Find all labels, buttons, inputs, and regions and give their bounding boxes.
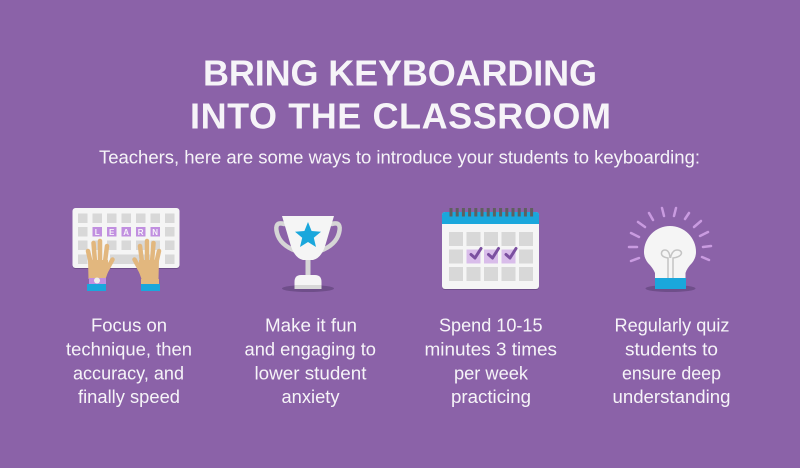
icon: keyboard with hands: E xyxy=(109,228,115,237)
text: focus on technique xyxy=(66,314,192,407)
text: spend 10-15 minutes: Spend 10-15 xyxy=(439,314,542,336)
text: spend 10-15 minutes: practicing xyxy=(451,386,531,407)
subtitle: Teachers, here are some ways to introduce your students to keyboarding: xyxy=(99,146,700,168)
text: regularly quiz: Regularly quiz xyxy=(614,314,730,336)
text: make it fun: lower student xyxy=(254,362,366,384)
text: focus on technique: finally speed xyxy=(78,386,180,407)
text: regularly quiz xyxy=(612,314,730,407)
text: focus on technique: technique, then xyxy=(66,338,192,360)
text: focus on technique: accuracy, and xyxy=(73,362,184,384)
icon: light bulb xyxy=(629,208,711,292)
text: spend 10-15 minutes: minutes 3 times xyxy=(424,338,557,360)
title: BRING KEYBOARDING xyxy=(203,52,597,94)
text: make it fun: anxiety xyxy=(282,386,340,407)
text: regularly quiz: students to xyxy=(625,338,718,360)
icon: calendar with checks xyxy=(442,208,539,290)
icon: keyboard with hands: N xyxy=(152,228,158,237)
text: regularly quiz: ensure deep xyxy=(622,362,721,384)
text: focus on technique: Focus on xyxy=(91,314,167,336)
text: regularly quiz: understanding xyxy=(612,386,730,407)
text: spend 10-15 minutes xyxy=(424,314,557,407)
title xyxy=(190,52,611,136)
icon: keyboard with hands xyxy=(72,208,180,291)
text: make it fun: Make it fun xyxy=(265,314,357,336)
icon: keyboard with hands: L xyxy=(95,228,100,237)
title: INTO THE CLASSROOM xyxy=(190,96,611,136)
icon: keyboard with hands: A xyxy=(123,228,129,237)
text: spend 10-15 minutes: per week xyxy=(454,362,529,384)
icon: trophy with star xyxy=(276,216,340,292)
icon: keyboard with hands: R xyxy=(138,228,144,237)
text: make it fun xyxy=(244,314,376,407)
text: make it fun: and engaging to xyxy=(244,338,376,360)
